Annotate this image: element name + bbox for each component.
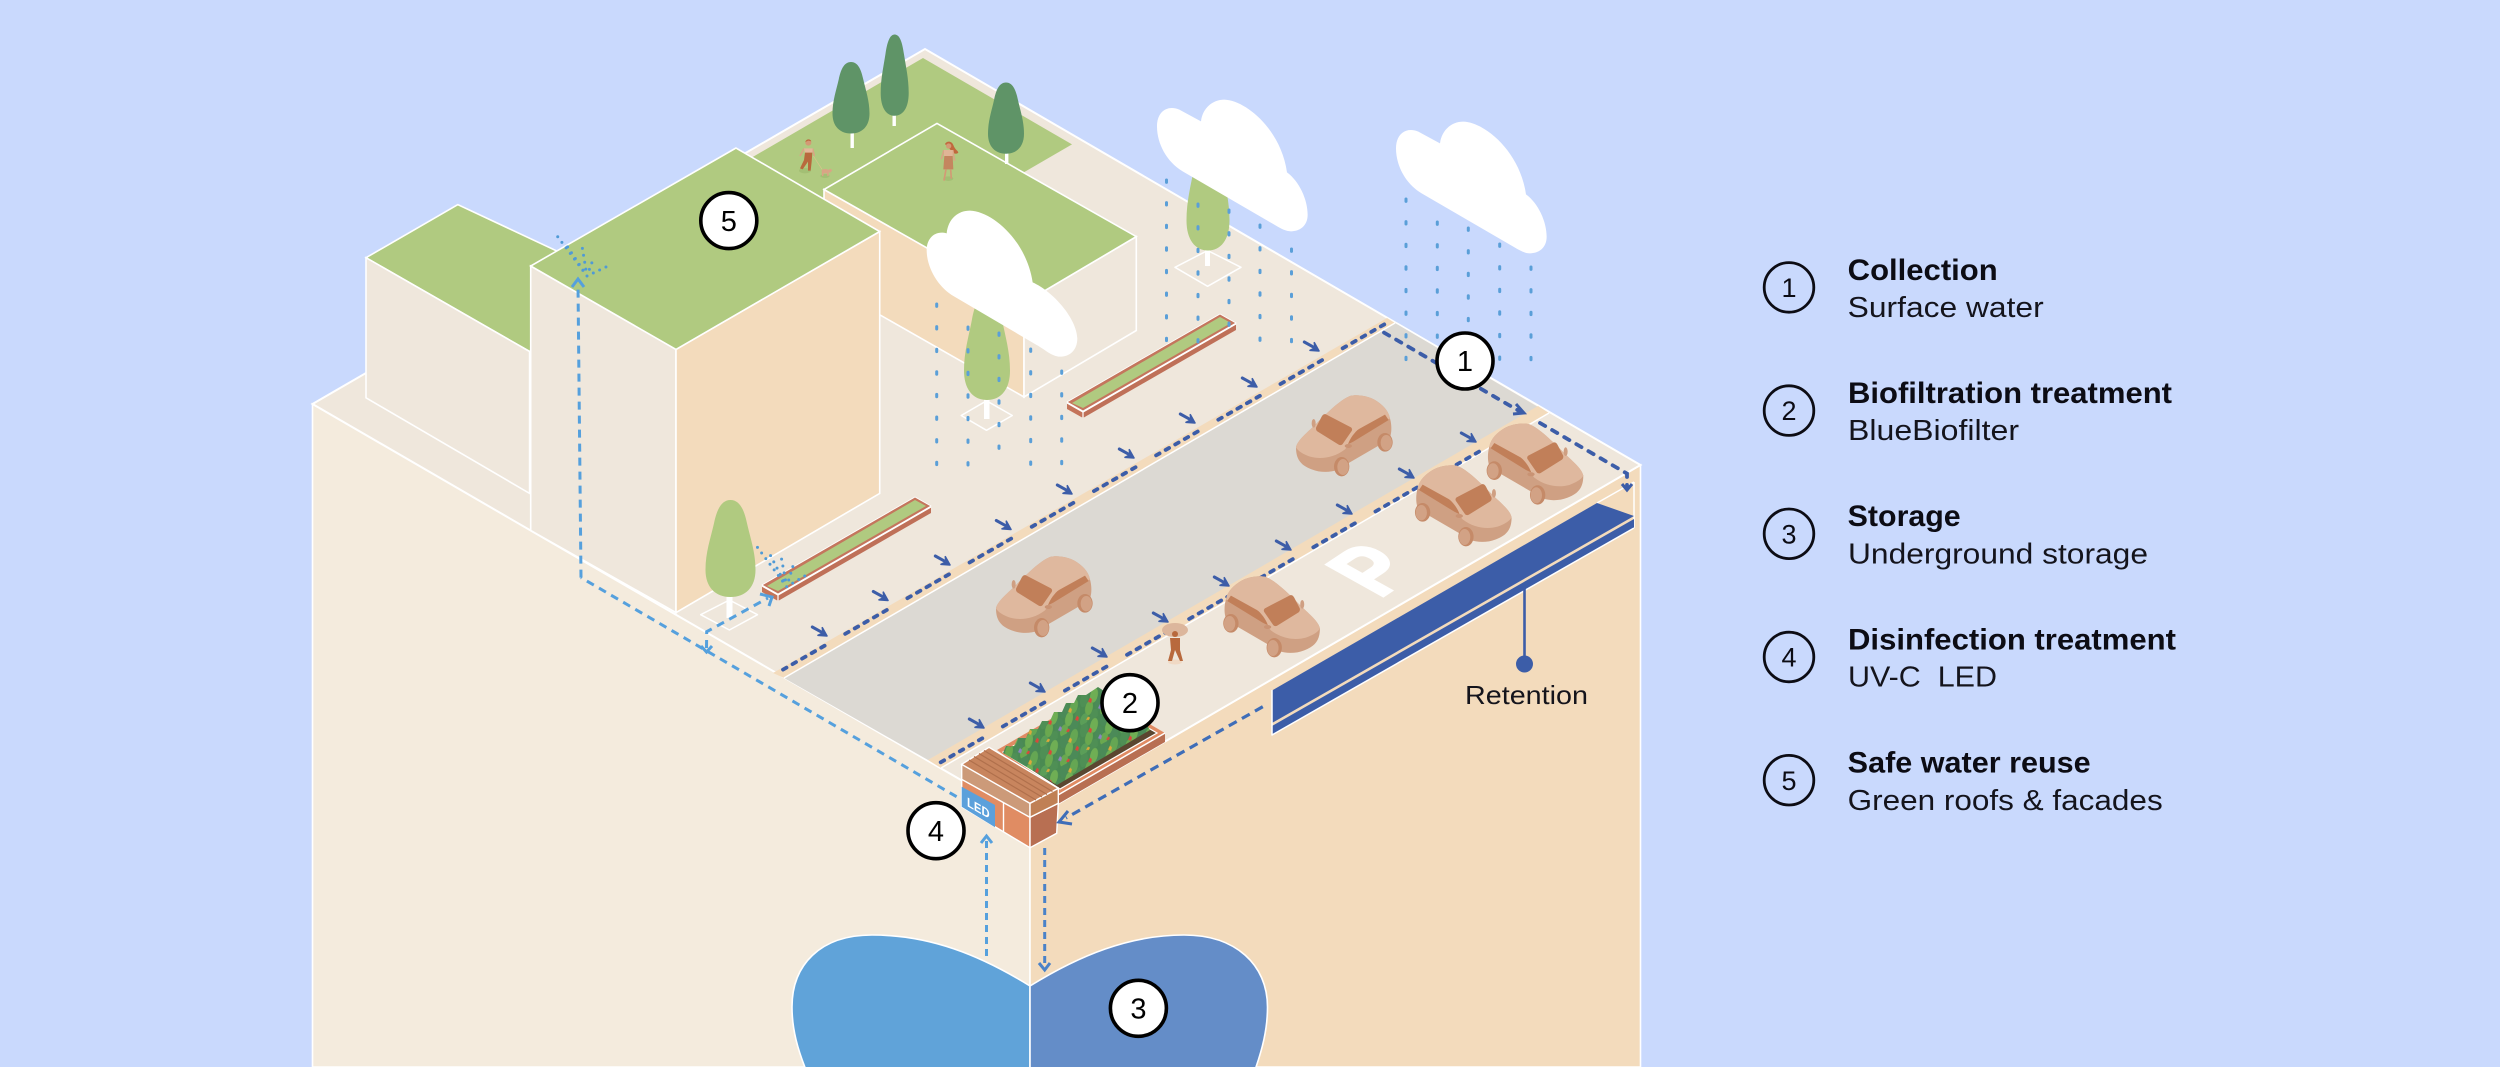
disinfection kiosk [962,747,1058,848]
cloud one [927,211,1077,357]
legend item 2: BlueBiofilter [1848,415,2019,447]
site surface [312,49,1640,820]
left wall [531,266,676,613]
soil inner outline [1003,698,1157,789]
green roof [531,148,880,349]
right lower face [1030,803,1058,848]
legend item 1 [1764,254,2044,324]
road drainage dashes [783,324,1632,762]
marker 2: 2 [1122,688,1138,720]
biofilter planter [997,687,1165,804]
marker 3 [1110,980,1166,1036]
legend item 2: 2 [1781,396,1797,426]
legend item 1: Collection [1848,254,1998,287]
marker 4: 4 [928,816,944,848]
retention tank [1272,482,1634,735]
street tree back [1175,143,1241,286]
left lobe [792,935,1030,1067]
car on road upper [1296,395,1393,476]
spray on planter [754,543,808,587]
upper dashes [783,324,1385,670]
orange wall [824,190,1024,397]
cloud three [1396,122,1547,253]
tree base [1175,250,1241,286]
road [773,318,1549,768]
water path from kiosk to building [572,279,957,797]
spray on main roof [555,234,610,276]
street tree middle [961,295,1012,430]
legend item 5: Safe water reuse [1848,747,2091,780]
tree base [961,401,1012,430]
pipe from storage to kiosk [981,836,992,956]
small back building [366,205,640,493]
right soil face [1030,465,1640,1067]
tank front [1272,519,1634,735]
tank top [1272,503,1634,723]
cars [996,395,1583,657]
tree base [701,600,758,630]
marker 1 [1437,333,1493,389]
flow arrows upper row [812,342,1319,636]
parking letter P: P [1305,531,1437,609]
rain under cloud three [1406,199,1531,378]
wall [366,258,530,493]
green roof [366,205,640,352]
recess outline [1597,482,1634,528]
LED text: LED [967,794,990,822]
parked car middle [1415,465,1512,546]
person with dog [799,139,832,178]
branch arrowheads [701,594,772,652]
main building [531,148,880,613]
marker 1: 1 [1457,346,1473,378]
wood slat top [962,747,1058,803]
legend item 2: Biofiltration treatment [1848,377,2172,410]
back park lawn [751,58,1072,244]
legend item 5 [1764,747,2163,817]
legend item 4: UV-C LED [1848,662,1997,694]
marker 5: 5 [721,206,737,238]
label text: Retention [1465,680,1588,710]
LED panel [962,787,995,827]
planter rim [997,693,1165,795]
upper kerb strip [773,318,1395,678]
tree [881,34,909,126]
left soil face [312,404,1030,1067]
green planter front [762,497,931,601]
lower dashes [941,424,1527,762]
pipe from kiosk to storage [1039,848,1050,970]
leader dot [1516,656,1533,672]
riser pipe [578,285,581,578]
crown [964,295,1010,400]
right lobe [1030,935,1268,1067]
marker 3: 3 [1130,994,1146,1026]
marker 2 [1102,675,1158,731]
legend item 2 [1764,377,2172,447]
riser arrowhead [572,279,584,287]
planter side [1058,733,1165,804]
person on roof [941,142,958,181]
legend item 3 [1764,500,2148,570]
car on road lower [996,556,1093,637]
parked car far [1487,424,1583,505]
collection line edge [1540,423,1627,488]
branch pipe [706,598,768,648]
road surface [784,323,1543,760]
right wall [676,232,880,613]
legend item 4 [1764,623,2176,694]
crown [1186,143,1230,250]
plants [1003,687,1150,785]
legend item 3: 3 [1781,519,1797,549]
legend item 4: 4 [1781,643,1797,673]
legend item 3: Underground storage [1848,538,2148,570]
left lower face [962,779,1030,848]
marker 5 [701,193,757,249]
green roof [824,123,1136,303]
diagonal pipe [581,578,957,797]
legend item 5: Green roofs & facades [1848,785,2163,817]
lower kerb strip [928,406,1549,768]
light wall [1024,237,1136,397]
right upper band [1030,788,1058,817]
flow to kiosk from retention [1059,707,1263,824]
crown [706,500,756,597]
legend item 1: 1 [1781,273,1797,303]
trees on park lawn [832,34,1024,164]
legend item 5: 5 [1781,766,1797,796]
flow arrows lower row [969,433,1476,728]
tree [988,82,1024,164]
legend item 4: Disinfection treatment [1848,623,2176,656]
second building [824,123,1136,397]
parked car near [1223,576,1320,657]
cloud two [1157,100,1308,231]
tree [832,62,870,148]
legend item 3: Storage [1848,500,1961,533]
legend item 1: Surface water [1848,292,2044,324]
street tree front [701,500,758,630]
left upper band [962,764,1030,817]
ground block [312,49,1640,1067]
underground storage [792,935,1268,1067]
person with umbrella [1162,623,1188,664]
green planter back [1067,314,1236,418]
leader line [1523,587,1526,664]
collection line top [1384,333,1520,412]
rain under cloud one [937,304,1062,482]
retention label [1465,587,1588,710]
legend [1764,254,2176,817]
rain under cloud two [1166,180,1292,358]
marker 4 [908,803,964,859]
